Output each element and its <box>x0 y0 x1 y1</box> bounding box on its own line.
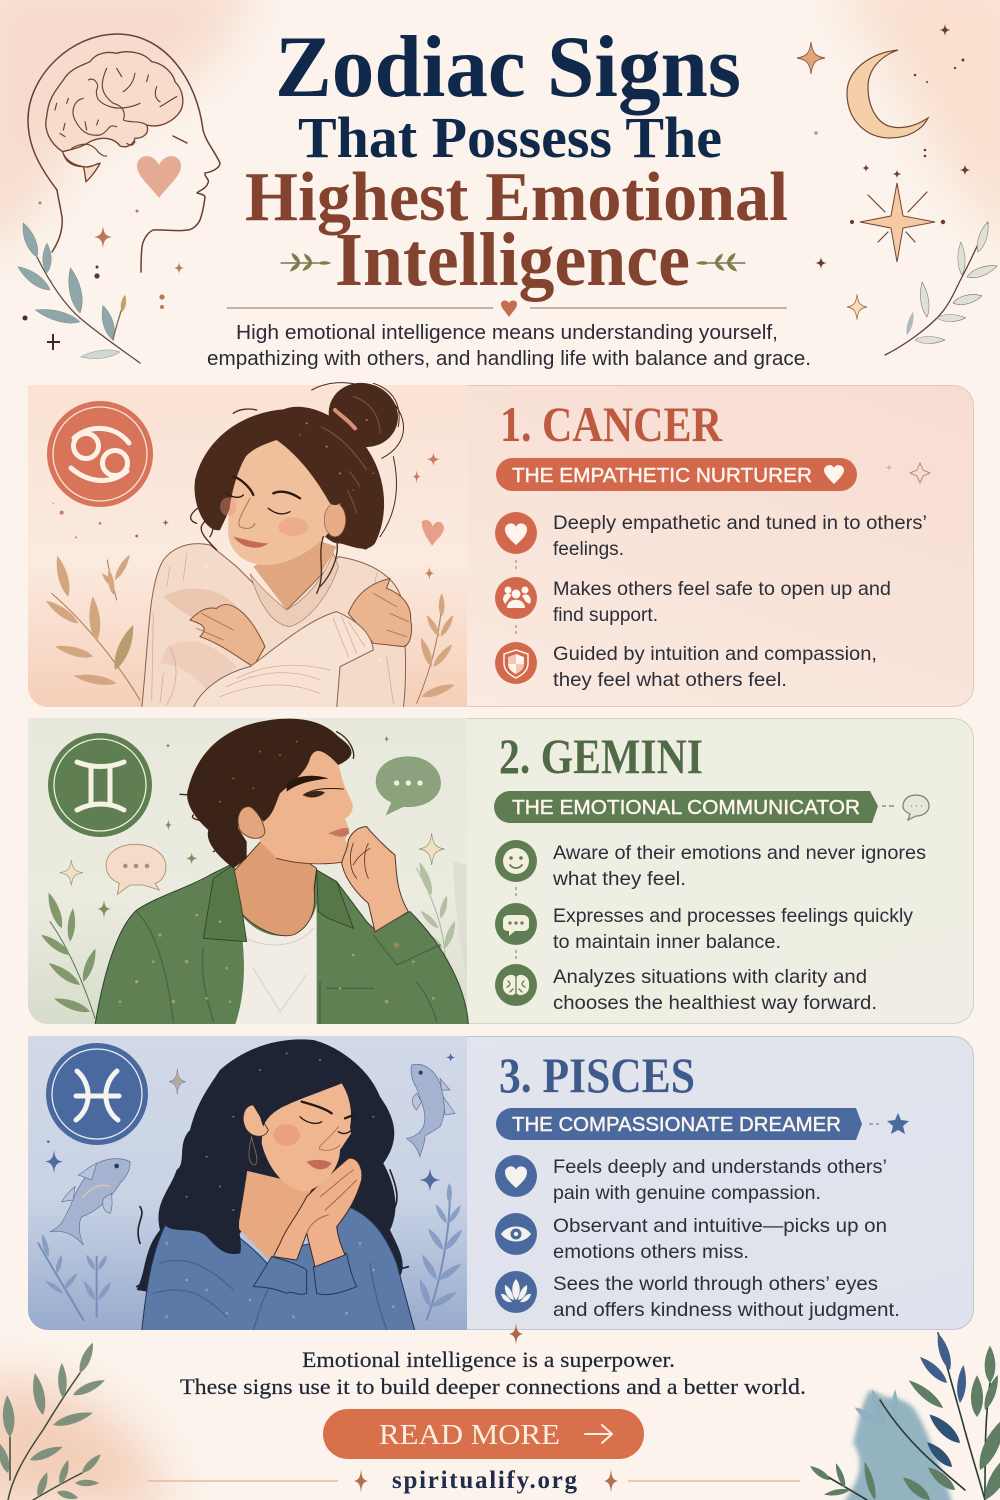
website footer <box>148 1467 800 1494</box>
title divider with heart <box>227 300 787 317</box>
sweater body <box>142 544 406 708</box>
cancer point 1: Deeply empathetic and tuned in to others’ <box>553 512 927 534</box>
gemini tag pill <box>494 791 878 823</box>
speech bubbles <box>376 757 441 815</box>
specks & small decoration <box>53 453 444 580</box>
cancer name: 1. CANCER <box>500 396 723 452</box>
pisces tag pill: THE COMPASSIONATE DREAMER <box>512 1113 841 1136</box>
face <box>262 1083 351 1192</box>
gemini point 3 <box>495 964 877 1014</box>
website footer: spiritualify.org <box>392 1467 578 1494</box>
pisces tag pill <box>496 1108 862 1140</box>
pisces point 2 <box>495 1213 887 1263</box>
hair back <box>195 407 384 549</box>
gemini connector <box>515 887 517 961</box>
collars <box>203 865 353 942</box>
panel: cancer <box>28 373 974 708</box>
pisces point 3: Sees the world through others’ eyes <box>553 1273 878 1295</box>
fish left <box>50 1159 130 1245</box>
right hand <box>348 578 412 647</box>
neck <box>233 835 317 936</box>
face <box>228 440 342 565</box>
pisces point 1: Feels deeply and understands others’ <box>553 1156 887 1178</box>
pisces star ornament <box>869 1113 909 1134</box>
hands <box>273 1158 362 1267</box>
sleeves <box>193 612 373 708</box>
heart <box>137 156 181 198</box>
hair <box>187 719 351 868</box>
cancer point 3: Guided by intuition and compassion, <box>553 643 877 665</box>
pisces point 1 <box>495 1155 887 1204</box>
gemini point 1: Aware of their emotions and never ignores <box>553 842 926 864</box>
sweater <box>142 1203 415 1332</box>
sleeves <box>253 1253 357 1295</box>
title laurels <box>281 252 745 273</box>
title: Highest Emotional <box>245 159 788 236</box>
brain <box>46 52 183 182</box>
gemini point 3: chooses the healthiest way forward. <box>553 992 877 1014</box>
footer left plant <box>0 1341 107 1500</box>
cancer tag pill <box>496 458 857 491</box>
face <box>253 748 353 864</box>
header right: moon <box>847 50 928 138</box>
pisces point 2: emotions others miss. <box>553 1241 749 1263</box>
neck <box>253 537 337 610</box>
tee <box>235 903 317 1025</box>
read more button: READ MORE <box>379 1419 560 1451</box>
bun <box>328 382 398 448</box>
footer right plant <box>808 1332 1000 1500</box>
cancer point 2: find support. <box>553 604 658 626</box>
gemini zodiac icon <box>48 733 152 837</box>
gemini leaves <box>50 922 95 1018</box>
subtitle: High emotional intelligence means understanding yourself, <box>236 322 778 344</box>
fish right <box>407 1064 455 1157</box>
panel: gemini <box>28 718 974 1025</box>
pisces zodiac icon <box>46 1043 148 1145</box>
gemini point 3: Analyzes situations with clarity and <box>553 966 867 988</box>
closing message: These signs use it to build deeper connections and a better world. <box>180 1374 806 1399</box>
title: Intelligence <box>335 218 690 302</box>
shirt <box>95 863 468 1025</box>
pisces point 3 <box>495 1271 900 1321</box>
header left sparkles <box>22 202 184 350</box>
subtitle: empathizing with others, and handling life with balance and grace. <box>207 348 811 370</box>
read more button <box>323 1409 644 1459</box>
left leaves <box>52 560 140 700</box>
gemini point 1: what they feel. <box>552 868 686 890</box>
hair back <box>137 1039 403 1297</box>
gemini point 1 <box>495 840 926 890</box>
gemini illustration <box>28 718 468 1025</box>
gemini chat ornament <box>882 795 929 820</box>
cancer point 1: feelings. <box>553 538 624 560</box>
cancer point 2: Makes others feel safe to open up and <box>553 578 891 600</box>
cancer sparkles <box>886 463 930 483</box>
pisces point 1: pain with genuine compassion. <box>553 1182 821 1204</box>
header left branch <box>15 221 140 363</box>
title <box>245 19 788 302</box>
pisces foliage <box>38 1183 464 1320</box>
front hair over shoulder <box>166 1168 248 1254</box>
subtitle <box>207 322 811 370</box>
pisces point 3: and offers kindness without judgment. <box>553 1299 900 1321</box>
gemini point 2: to maintain inner balance. <box>553 931 781 953</box>
header right branch <box>885 221 999 355</box>
pisces illustration <box>28 1036 467 1332</box>
panel: pisces <box>28 1036 974 1332</box>
closing message <box>180 1347 806 1399</box>
gemini name: 2. GEMINI <box>499 728 703 784</box>
title: Zodiac Signs <box>275 19 741 116</box>
pisces sparkles <box>45 1053 455 1192</box>
cancer point 2 <box>495 577 891 626</box>
footer ornament <box>509 1323 523 1345</box>
sparkles <box>60 833 444 885</box>
pisces name: 3. PISCES <box>499 1047 695 1103</box>
closing message: Emotional intelligence is a superpower. <box>302 1347 675 1372</box>
cancer zodiac icon <box>47 401 153 507</box>
cancer illustration <box>28 373 467 708</box>
header right: stars <box>797 24 970 320</box>
cancer tag pill: THE EMPATHETIC NURTURER <box>512 464 812 487</box>
left hand <box>190 605 265 667</box>
gemini tag pill: THE EMOTIONAL COMMUNICATOR <box>512 796 860 819</box>
gemini point 2: Expresses and processes feelings quickly <box>553 905 913 927</box>
front hair <box>260 1075 355 1134</box>
cancer connector <box>515 560 517 637</box>
header illustration: head with brain and heart <box>28 34 220 272</box>
pisces point 2: Observant and intuitive—picks up on <box>553 1215 887 1237</box>
title: That Possess The <box>298 105 722 170</box>
neck and chest <box>237 1170 313 1260</box>
gemini point 2 <box>495 903 913 953</box>
cancer point 3 <box>495 642 877 691</box>
thinking hand <box>342 827 408 932</box>
front hair <box>246 422 350 505</box>
cancer point 1 <box>495 512 927 560</box>
cancer point 3: they feel what others feel. <box>553 669 787 691</box>
